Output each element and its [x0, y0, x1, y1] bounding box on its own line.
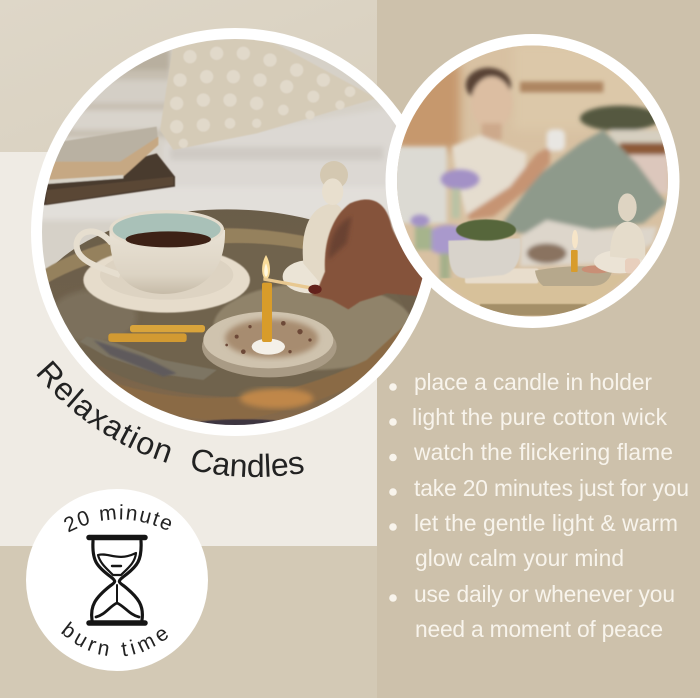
background: right column [377, 0, 700, 698]
rattan [480, 304, 587, 316]
bullet 2: light the pure cotton wick [412, 404, 668, 430]
small candle [571, 250, 578, 272]
saucer [83, 247, 250, 313]
bullet 3: watch the flickering flame [413, 439, 673, 465]
books [43, 127, 175, 205]
candle [262, 283, 272, 342]
match [263, 277, 310, 289]
wall shelf [520, 82, 603, 92]
blurred bedding [42, 50, 394, 220]
pillow [393, 147, 447, 223]
tray [30, 209, 423, 424]
throw blanket [520, 220, 657, 267]
hair [466, 68, 511, 102]
large photo circle: lighting a candle on a tray [30, 28, 439, 436]
cup [109, 230, 225, 294]
bullet 5: let the gentle light & warm [414, 510, 678, 536]
bullet 1: place a candle in holder [414, 369, 652, 395]
face [468, 73, 512, 106]
dried lavender [80, 337, 217, 380]
table [440, 275, 627, 305]
cup [547, 129, 565, 151]
background: bottom left panel [0, 546, 377, 698]
flowers [411, 169, 479, 280]
bullet 5: glow calm your mind [415, 545, 624, 571]
hand [312, 199, 430, 309]
small photo circle: woman resting with candle [386, 34, 680, 328]
badge text bottom: burn time [61, 621, 168, 656]
small holder [535, 266, 613, 286]
flame [262, 255, 270, 279]
bullet 5 [389, 510, 678, 571]
small flame [572, 230, 578, 249]
background: top left panel [0, 0, 377, 152]
plant [580, 106, 660, 131]
badge text top: 20 minute [64, 504, 172, 532]
bullet 6 [389, 581, 675, 642]
trousers [500, 130, 667, 233]
selenite bar [465, 268, 538, 283]
blurred room [397, 43, 663, 150]
background: middle left panel [0, 152, 377, 546]
badge: 20 minute burn time [26, 489, 208, 671]
instructions list [389, 369, 689, 642]
bullet 6: need a moment of peace [415, 616, 663, 642]
succulent [456, 219, 516, 241]
title: Relaxation Candles: Relaxation Candles [36, 360, 304, 478]
pillow [160, 37, 377, 150]
cup handle [77, 231, 120, 275]
small buddha [594, 193, 646, 273]
sweater [452, 135, 527, 217]
spare candles [130, 325, 205, 332]
bullet 4: take 20 minutes just for you [414, 475, 689, 501]
icon: hourglass [89, 538, 145, 623]
bullet 6: use daily or whenever you [414, 581, 675, 607]
arm [467, 147, 550, 220]
plant pot [448, 238, 520, 278]
ceramic holder [202, 337, 337, 378]
buddha figurine [283, 161, 348, 293]
